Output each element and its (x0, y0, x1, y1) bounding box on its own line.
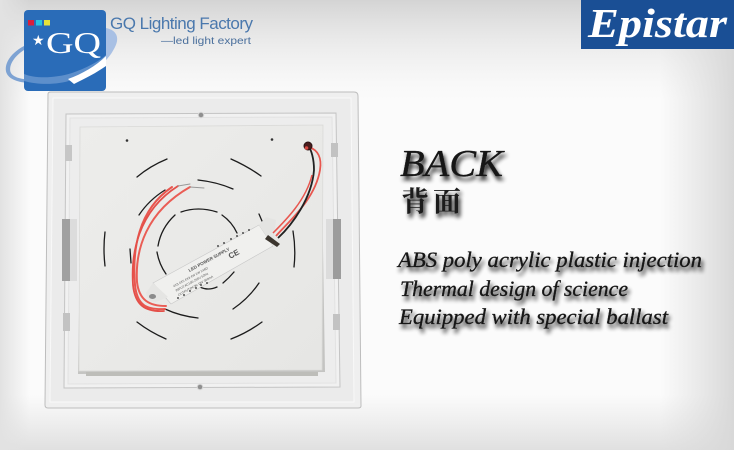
logo star: ★ (32, 33, 45, 49)
heading: Chinese: 背面 (401, 186, 461, 218)
mounting ear (146, 283, 168, 302)
feature line 1: ABS poly acrylic plastic injection (396, 247, 702, 272)
logo badge (24, 10, 106, 91)
heading: BACK: BACK (400, 143, 505, 185)
knockout arcs (104, 159, 295, 339)
ballast label: OUTPUT:DC36-18V 300mA (177, 274, 215, 297)
bottom shadow step (86, 372, 318, 376)
ballast dots (177, 229, 250, 299)
product photo: LED panel back (45, 92, 361, 408)
ballast label: CE (227, 247, 242, 261)
ballast connector (265, 235, 280, 247)
badge: Epistar: Epistar (587, 0, 728, 46)
logo letters: GQ (46, 25, 101, 60)
logo colour squares (28, 20, 50, 26)
company name: GQ Lighting Factory (110, 14, 254, 33)
back plate (78, 125, 325, 374)
side clips (62, 143, 341, 331)
logo swoosh behind badge (6, 46, 49, 83)
ballast label (169, 243, 245, 297)
feature list (396, 247, 702, 329)
ballast: LED power supply (146, 217, 280, 304)
logo: GQ Lighting Factory (6, 10, 254, 91)
feature line 3: Equipped with special ballast (398, 304, 669, 329)
ballast label: 4X3 4X5 4X3 4W 1W 1X6D (172, 266, 209, 288)
rivets (197, 112, 204, 390)
feature line 2: Thermal design of science (400, 276, 628, 301)
screw holes (126, 138, 273, 142)
tagline: —led light expert (161, 35, 251, 47)
inner recess (64, 113, 340, 388)
ballast label: LED POWER SUPPLY (188, 247, 230, 273)
red wires to ballast (133, 184, 204, 311)
logo swoosh front (24, 55, 106, 84)
output wires and grommet (273, 142, 321, 238)
outer frame (45, 92, 361, 408)
ballast label: INPUT:AC100-265V 50Hz (175, 271, 209, 293)
